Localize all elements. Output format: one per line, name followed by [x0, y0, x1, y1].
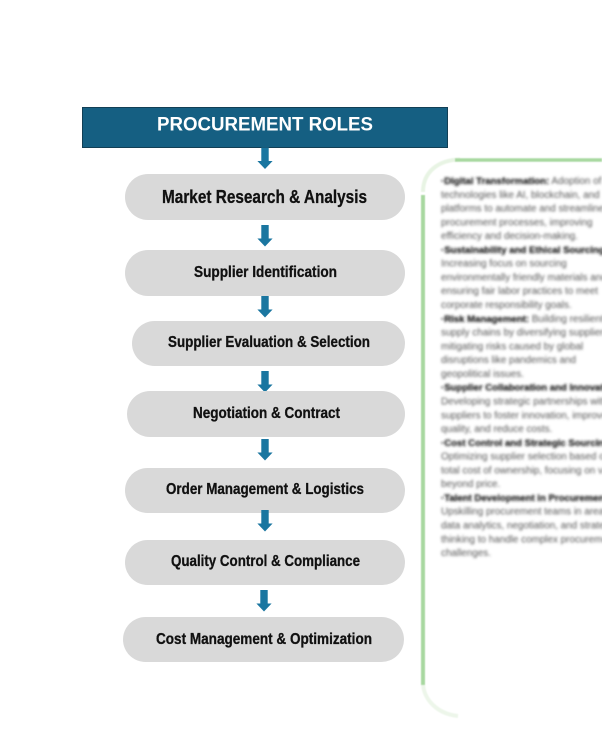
arrow: to quality control [257, 510, 273, 532]
step: supplier identification: Supplier Identification [194, 264, 337, 281]
panel text: mitigating risks caused by global [441, 341, 583, 352]
arrow: to cost management [256, 590, 272, 612]
panel text: ·Digital Transformation: Adoption of [441, 176, 602, 187]
step: market research and analysis: Market Research & Analysis [162, 187, 367, 207]
step: quality control and compliance: Quality Control & Compliance [171, 553, 360, 570]
step: cost management and optimization: Cost Management & Optimization [156, 631, 372, 648]
panel border [423, 160, 602, 716]
title banner [82, 108, 448, 148]
panel text: ensuring fair labor practices to meet [441, 286, 598, 297]
panel text: platforms to automate and streamline [441, 204, 602, 215]
panel text: Increasing focus on sourcing [441, 259, 567, 270]
panel text: challenges. [441, 548, 491, 559]
step: order management and logistics [125, 468, 405, 513]
panel text: disruptions like pandemics and [441, 355, 576, 366]
panel text: environmentally friendly materials and [441, 272, 602, 284]
panel text: beyond price. [441, 479, 500, 490]
arrow: title to market research [257, 148, 273, 169]
panel text [441, 176, 602, 559]
panel text: procurement processes, improving [441, 217, 592, 228]
step: quality control and compliance [125, 540, 405, 585]
panel text: corporate responsibility goals. [441, 300, 572, 311]
panel text: ·Risk Management: Building resilient [441, 314, 602, 325]
arrow: to supplier identification [257, 225, 273, 246]
title: PROCUREMENT ROLES [157, 114, 373, 136]
panel text: geopolitical issues. [441, 369, 524, 380]
panel text: quality, and reduce costs. [441, 424, 552, 435]
step: supplier evaluation and selection: Supplier Evaluation & Selection [168, 334, 370, 351]
arrow: to order management [257, 439, 273, 460]
step: order management and logistics: Order Management & Logistics [166, 481, 364, 498]
panel text: efficiency and decision-making. [441, 231, 578, 242]
panel text: technologies like AI, blockchain, and [441, 190, 600, 201]
step: supplier identification [125, 250, 405, 296]
step: market research and analysis [125, 174, 405, 220]
panel: procurement trends [423, 160, 602, 716]
step: negotiation and contract [127, 391, 405, 437]
step: supplier evaluation and selection [132, 321, 405, 366]
arrow: to supplier evaluation [257, 296, 273, 318]
arrow: to negotiation [257, 371, 273, 392]
step: cost management and optimization [123, 617, 404, 662]
step: negotiation and contract: Negotiation & Contract [193, 405, 340, 422]
